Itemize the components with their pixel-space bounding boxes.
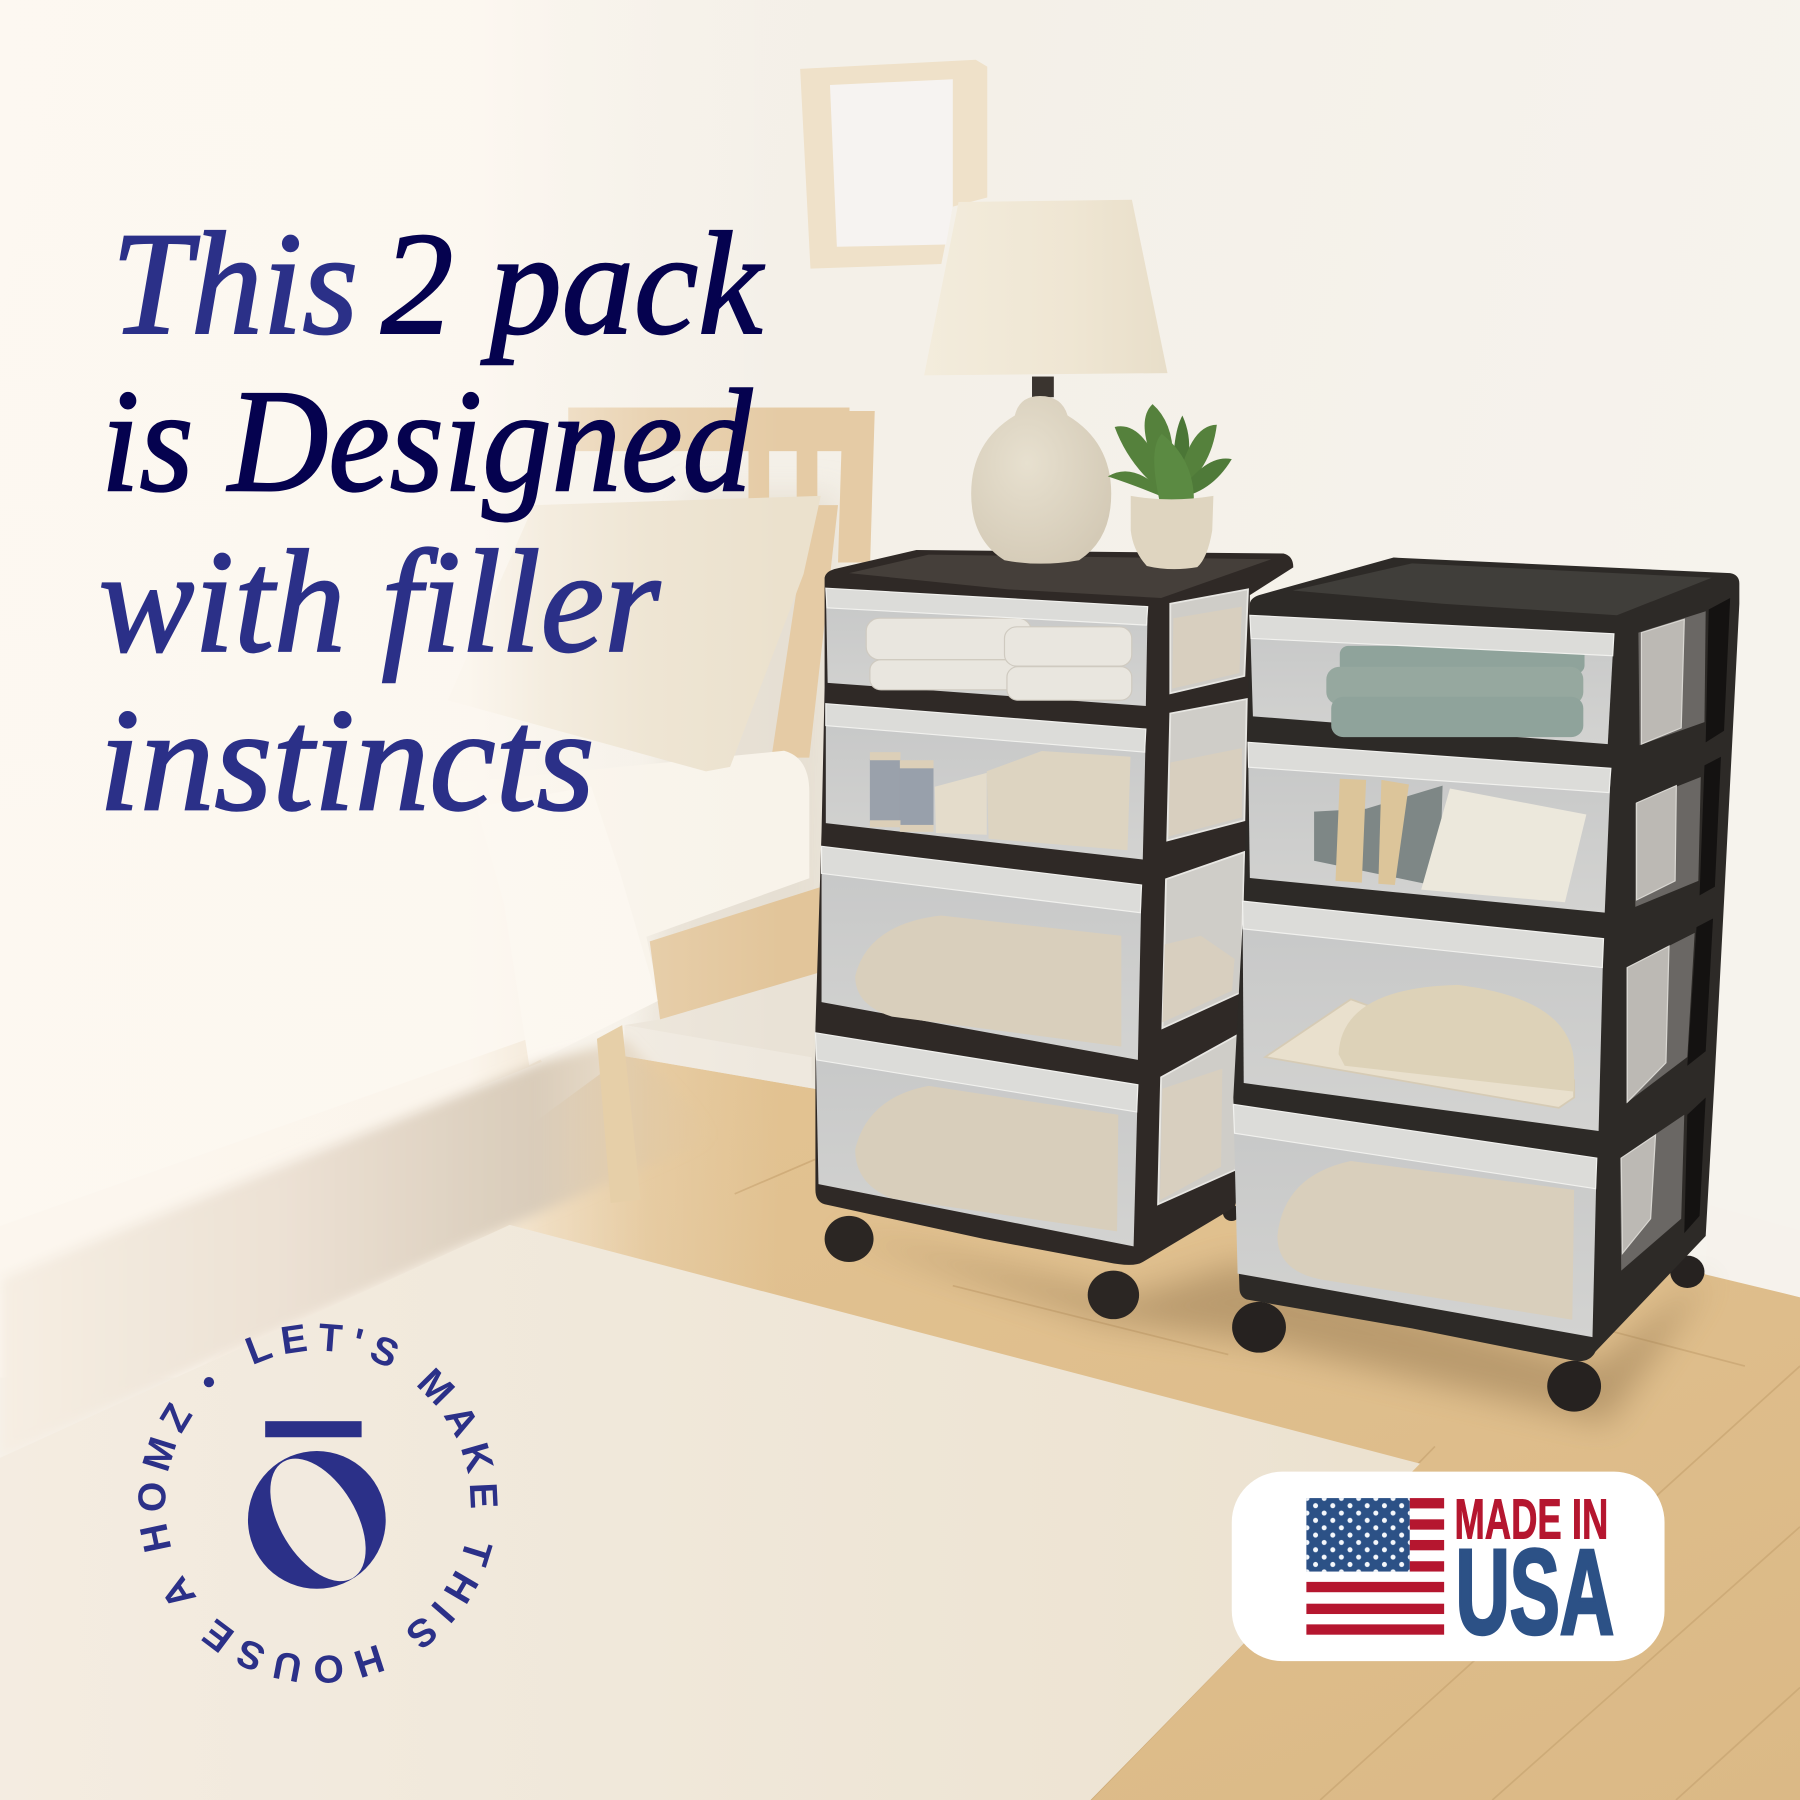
green towels [1326,646,1585,737]
dark books [1314,786,1443,887]
drawer 4 [1233,1104,1597,1337]
large box [987,751,1131,850]
under-bed shadow [0,1039,717,1458]
towels [866,618,1132,700]
spools [870,752,934,832]
side windows [1621,619,1684,1253]
wall below bed rail [624,972,820,1057]
plant pot [1131,496,1213,569]
pillow [448,496,821,771]
left drawer cabinet [815,550,1293,1319]
folded blanket [855,916,1121,1047]
logo o mark [248,1442,386,1597]
small box [935,773,987,835]
right drawer cabinet [1232,558,1739,1412]
rug [0,1225,1420,1800]
art card [1421,789,1586,902]
cabinet frame [815,550,1293,1265]
top surface [1293,563,1712,615]
wall shadow behind bed [643,494,838,1091]
drawer 4 [815,1033,1138,1246]
folded blanket [855,1086,1118,1231]
side panels [1158,589,1248,1204]
usa label: USA [1456,1525,1614,1660]
side contents [1160,607,1242,1200]
drawer 1 [826,588,1148,706]
made in usa badge [1232,1472,1665,1661]
picture frame [800,60,987,269]
lamp shade [924,200,1167,375]
drawer 1 [1250,615,1614,744]
headline [99,202,765,841]
drawer 2 [1248,742,1611,913]
knit hat [1339,985,1574,1092]
headline line: with filler: with filler [99,520,661,683]
drawer 3 [1243,901,1604,1131]
headline line: is Designed: is Designed [101,359,752,522]
american flag [1306,1498,1444,1635]
cabinet floor shadow [827,1228,1710,1423]
wood sticks [1336,779,1409,885]
bed mattress [0,751,809,1226]
drawer 2 [826,704,1146,860]
bed side rail [650,887,820,1019]
bed rail lower [0,1039,542,1278]
made in label: MADE IN [1454,1487,1608,1550]
casters [825,1205,1240,1319]
headline line: instincts: instincts [99,678,595,841]
folded blanket [1277,1161,1574,1320]
casters [1232,1256,1704,1412]
floor [0,1056,1800,1800]
cabinet frame [1233,558,1739,1361]
right baseboard [1705,1205,1800,1297]
bed headboard [568,408,875,758]
headline word: 2 pack: 2 pack [381,202,765,365]
top surface [849,555,1271,598]
headline word: This: This [111,202,358,365]
tray [1265,999,1574,1108]
badge background [1232,1472,1665,1661]
left baseboard [624,1025,812,1088]
lamp [924,200,1167,564]
bed leg [597,1025,641,1203]
drawer 3 [822,846,1142,1060]
circular tagline: LET'S MAKE THIS HOUSE A HOMZ [138,1324,498,1683]
outer side gaps [1684,598,1730,1233]
macron bar [265,1421,362,1437]
brand logo seal [138,1324,498,1683]
floor planks [735,1159,1800,1800]
draped blanket [476,786,658,1065]
lamp neck [1032,377,1054,397]
separator dot [204,1377,214,1387]
lamp base [971,396,1111,564]
side panels [1620,611,1706,1271]
potted plant [1108,404,1232,569]
left white fade overlay [0,0,781,1378]
